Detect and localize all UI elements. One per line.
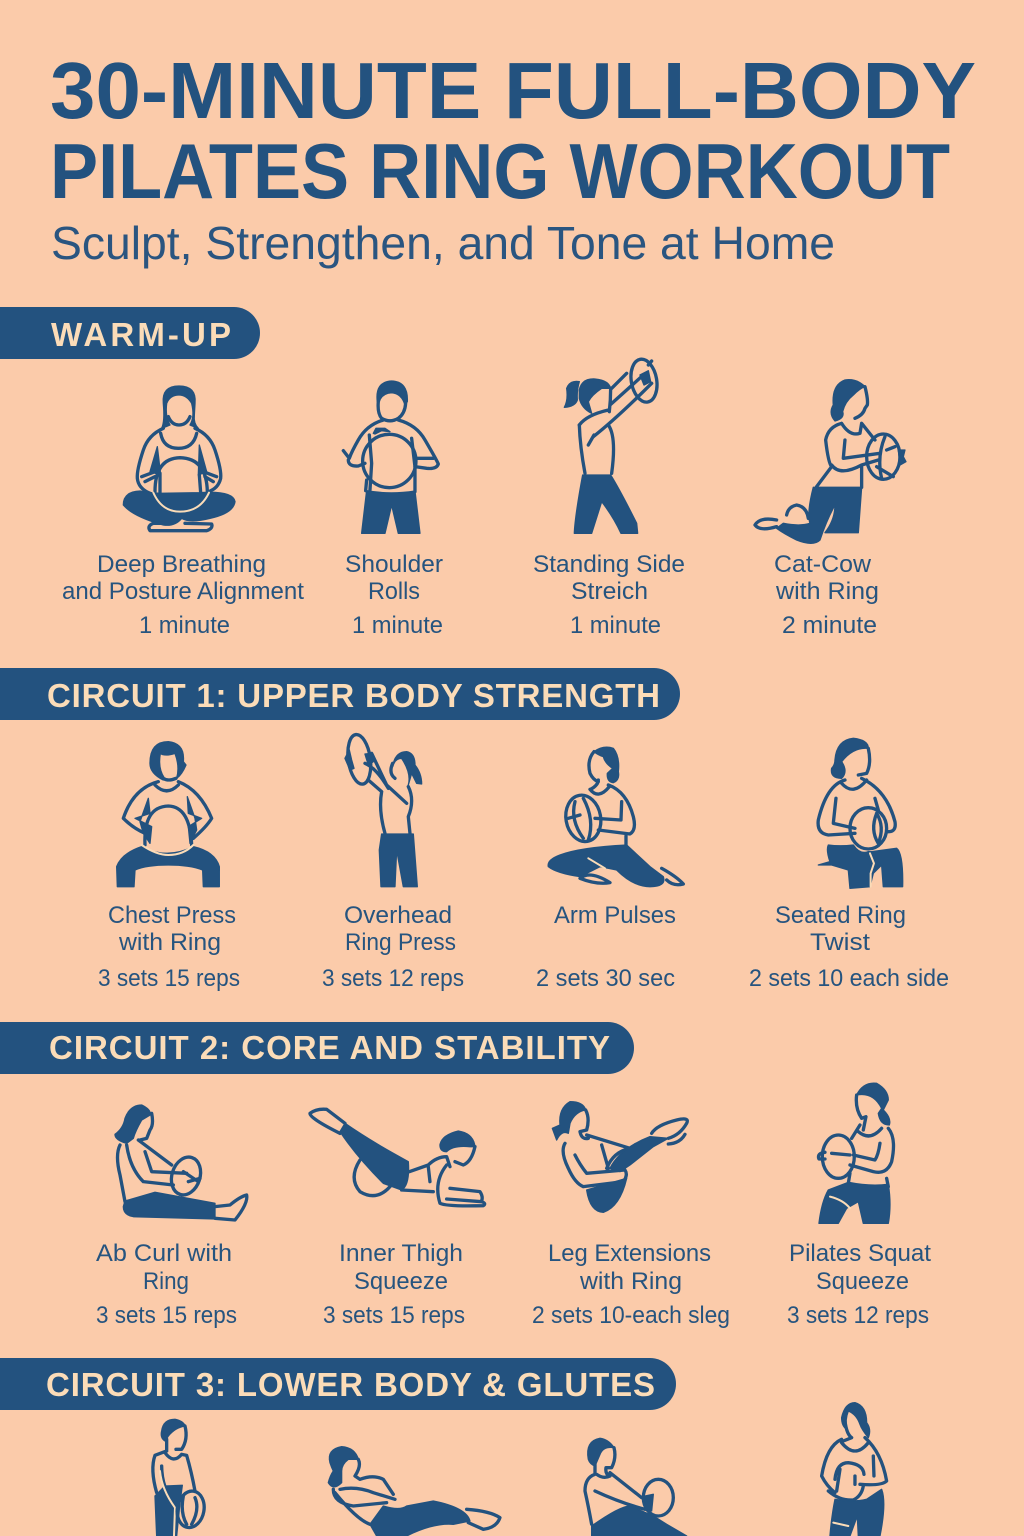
label: cat-cow (774, 551, 879, 639)
label: ab curl: Ring (143, 1268, 189, 1295)
label: overhead press: Overhead (344, 902, 452, 929)
icon: squat with ring (117, 742, 219, 887)
label: overhead press: 3 sets 12 reps (322, 965, 464, 992)
heading: circuit 3 (0, 1358, 676, 1410)
label: ab curl (96, 1240, 237, 1329)
panel: circuit 1 (0, 668, 949, 992)
heading: circuit 2: CIRCUIT 2: CORE AND STABILITY (49, 1029, 610, 1066)
label: shoulder rolls: 1 minute (352, 612, 443, 639)
icon: standing overhead ring (345, 733, 422, 887)
label: leg extensions: with Ring (579, 1268, 682, 1295)
label: arm pulses: 2 sets 30 sec (536, 965, 675, 992)
title (50, 46, 976, 215)
icon: teaser leg extension (552, 1102, 687, 1212)
icon: standing ring at waist (822, 1403, 887, 1536)
label: pilates squat squeeze (787, 1240, 931, 1329)
panel: warm-up (0, 307, 906, 639)
label: seated ring twist (749, 902, 949, 992)
label: arm pulses: Arm Pulses (554, 902, 676, 929)
exercise: overhead press (322, 733, 464, 992)
label: cat-cow: with Ring (775, 578, 879, 605)
label: seated ring twist: Seated Ring (775, 902, 906, 929)
exercise: shoulder rolls (343, 381, 443, 639)
icon: seated cross-legged with ring (123, 386, 235, 531)
exercise: seated ring twist (749, 738, 949, 992)
label: deep breathing (62, 551, 304, 639)
icon: seated ab curl (115, 1105, 247, 1220)
label: ab curl: 3 sets 15 reps (96, 1302, 237, 1329)
label: ab curl: Ab Curl with (96, 1240, 232, 1267)
title: 30-MINUTE FULL-BODY (50, 46, 976, 135)
icon: standing ring at chest (343, 381, 438, 533)
label: overhead press: Ring Press (345, 929, 456, 956)
label: chest press: with Ring (118, 929, 221, 956)
icon: seated ring twist (818, 738, 903, 888)
heading: circuit 1 (0, 668, 680, 720)
label: chest press: Chest Press (108, 902, 236, 929)
title: PILATES RING WORKOUT (50, 127, 950, 215)
label: seated ring twist: Twist (810, 929, 870, 956)
label: inner thigh squeeze: Squeeze (354, 1268, 448, 1295)
label: arm pulses (536, 902, 676, 992)
exercise: standing side stretch (533, 357, 685, 639)
icon: standing ring overhead (564, 357, 660, 533)
panel: circuit 2 (0, 1022, 931, 1329)
icon: standing with ring at hip (153, 1419, 207, 1536)
panel: circuit 3 (0, 1358, 887, 1536)
label: leg extensions: 2 sets 10-each sleg (532, 1302, 730, 1329)
label: cat-cow: Cat-Cow (774, 551, 872, 578)
heading: warm-up (0, 307, 260, 359)
label: chest press: 3 sets 15 reps (98, 965, 240, 992)
heading: circuit 3: CIRCUIT 3: LOWER BODY & GLUTES (46, 1366, 655, 1403)
label: overhead press (322, 902, 464, 992)
exercise: chest press (98, 742, 240, 992)
label: cat-cow: 2 minute (782, 612, 877, 639)
heading: circuit 1: CIRCUIT 1: UPPER BODY STRENGTH (47, 677, 660, 714)
label: standing side stretch (533, 551, 685, 639)
label: shoulder rolls: Rolls (368, 578, 420, 605)
label: standing side stretch: Standing Side (533, 551, 685, 578)
label: inner thigh squeeze: Inner Thigh (339, 1240, 463, 1267)
heading: circuit 2 (0, 1022, 634, 1074)
icon: seated with ring at side (548, 747, 683, 887)
label: pilates squat squeeze: 3 sets 12 reps (787, 1302, 929, 1329)
label: deep breathing: 1 minute (139, 612, 230, 639)
label: shoulder rolls (345, 551, 443, 639)
exercise: leg extensions (532, 1102, 730, 1329)
exercise: cat-cow (755, 380, 906, 639)
label: shoulder rolls: Shoulder (345, 551, 443, 578)
exercise: inner thigh squeeze (310, 1109, 485, 1329)
exercise: pilates squat squeeze (787, 1083, 931, 1329)
label: leg extensions: Leg Extensions (548, 1240, 711, 1267)
icon: seated curl with ring (328, 1447, 500, 1536)
label: leg extensions (532, 1240, 730, 1329)
label: inner thigh squeeze: 3 sets 15 reps (323, 1302, 465, 1329)
label: pilates squat squeeze: Pilates Squat (789, 1240, 931, 1267)
label: deep breathing: Deep Breathing (97, 551, 266, 578)
subtitle: Sculpt, Strengthen, and Tone at Home (51, 217, 835, 269)
icon: seated with ring forward (585, 1438, 687, 1536)
label: chest press (98, 902, 240, 992)
exercise: ab curl (96, 1105, 247, 1329)
label: deep breathing: and Posture Alignment (62, 578, 304, 605)
icon: standing squat with ring (818, 1083, 894, 1223)
label: pilates squat squeeze: Squeeze (816, 1268, 909, 1295)
label: inner thigh squeeze (323, 1240, 465, 1329)
label: seated ring twist: 2 sets 10 each side (749, 965, 949, 992)
label: standing side stretch: 1 minute (570, 612, 661, 639)
icon: kneeling with ring (755, 380, 906, 543)
icon: prone leg lift (310, 1109, 485, 1206)
heading: warm-up: WARM-UP (51, 316, 231, 353)
exercise: arm pulses (536, 747, 683, 992)
exercise: deep breathing (62, 386, 304, 639)
label: standing side stretch: Streich (571, 578, 648, 605)
